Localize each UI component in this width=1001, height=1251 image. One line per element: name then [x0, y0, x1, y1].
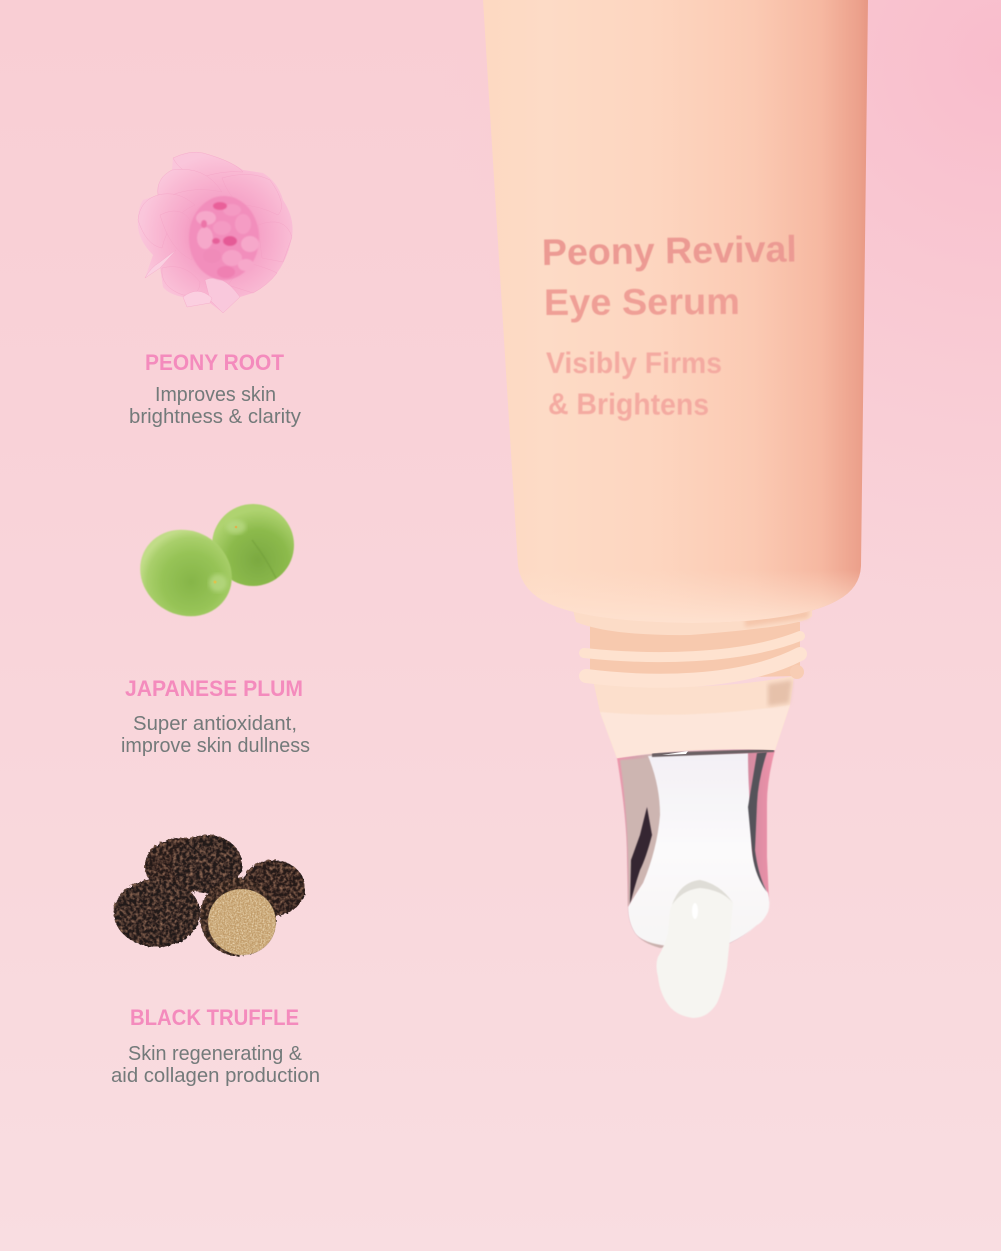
product name: Peony Revival — [542, 228, 797, 273]
neck threads — [573, 606, 812, 681]
heading: peony root: PEONY ROOT — [145, 350, 285, 375]
description: japanese plum — [121, 713, 310, 757]
serum drop — [656, 880, 733, 1018]
tube label text: Eye Serum — [544, 281, 740, 323]
icon: peony flower — [138, 152, 293, 313]
heading: japanese plum: JAPANESE PLUM — [125, 676, 303, 701]
ingredient: black truffle — [111, 835, 320, 1087]
description: japanese plum: improve skin dullness — [121, 735, 310, 757]
tube label text: & Brightens — [548, 388, 709, 422]
description: peony root: brightness & clarity — [129, 406, 301, 428]
tube label text — [542, 228, 797, 422]
description: japanese plum: Super antioxidant, — [133, 713, 297, 735]
icon: truffles — [114, 835, 305, 960]
description: black truffle — [111, 1043, 320, 1087]
description: peony root — [129, 384, 301, 428]
tube body — [483, 0, 868, 623]
icon: plums — [124, 504, 294, 633]
description: black truffle: Skin regenerating & — [128, 1043, 303, 1065]
description: peony root: Improves skin — [155, 384, 276, 406]
product: eye serum tube — [480, 0, 880, 1018]
heading: black truffle: BLACK TRUFFLE — [130, 1005, 299, 1030]
ingredient: peony root — [129, 152, 301, 428]
ingredient: japanese plum — [121, 504, 310, 757]
tube applicator tip — [617, 749, 775, 948]
description: black truffle: aid collagen production — [111, 1065, 320, 1087]
product claim: Visibly Firms — [546, 347, 722, 380]
collar — [593, 676, 794, 758]
